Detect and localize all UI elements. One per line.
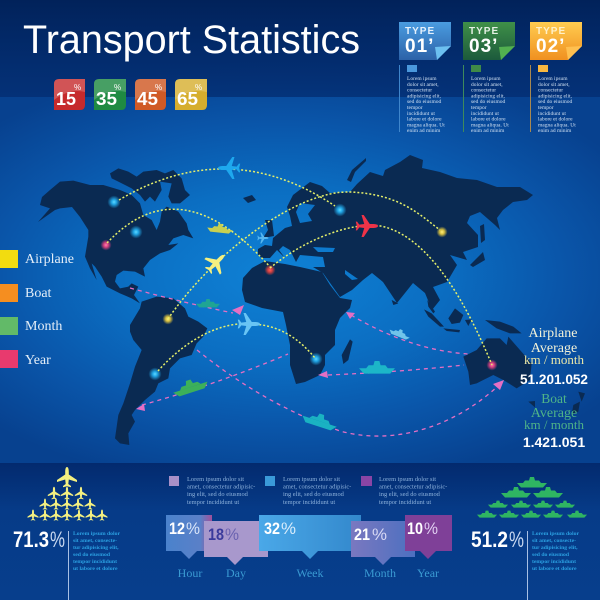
panel: type 03: dolor sit amet,	[471, 82, 503, 88]
badge 45: %	[155, 83, 162, 92]
airplane average stats	[520, 326, 588, 387]
panel: type 01: incididunt ut	[407, 111, 435, 117]
panel: type 02: enim ad minim	[538, 128, 572, 134]
panel: type 03: incididunt ut	[471, 111, 499, 117]
icon: blue plane	[218, 157, 240, 179]
chart labels	[178, 566, 439, 580]
airplane formation	[28, 467, 108, 521]
iceland	[243, 195, 256, 203]
key: blue: tempor incididunt ut	[283, 499, 335, 506]
panel: type 02: dolor sit amet,	[538, 82, 570, 88]
novaya zemlya	[347, 158, 366, 182]
key: purple: amet, consectetur adipisic-	[379, 484, 447, 490]
key: purple: ing elit, sed do eiusmod	[379, 491, 441, 498]
airplane average stats: km / month	[524, 352, 584, 367]
madagascar	[342, 339, 353, 364]
key: blue: Lorem ipsum dolor sit	[283, 476, 340, 483]
airplane average stats: 51.201.052	[520, 371, 588, 387]
badge 45	[135, 79, 166, 110]
boat average stats: Average	[531, 406, 577, 421]
airplane note: Lorem ipsum dolor	[73, 531, 120, 537]
panel: type 02: incididunt ut	[538, 111, 566, 117]
bar: week 32	[259, 515, 361, 559]
tasmania and new zealand	[528, 392, 585, 415]
airplane note	[68, 531, 120, 600]
boat average stats: km / month	[524, 417, 584, 432]
badge 35	[94, 79, 126, 110]
panel: type 03: tempor	[471, 105, 487, 111]
airplane note: tempor incididunt	[73, 559, 117, 565]
panel: type 02: tempor	[538, 105, 554, 111]
africa	[242, 261, 352, 384]
airplane note: ut labore et dolore	[73, 566, 118, 572]
panel: type 03: Lorem ipsum	[471, 76, 501, 82]
boat route arrowheads	[136, 305, 504, 411]
bar: hour 12: %	[186, 519, 200, 538]
panel: type 01: consectetur	[407, 88, 432, 94]
boat routes	[130, 288, 498, 436]
key: lavender	[169, 476, 255, 506]
south america	[115, 297, 207, 445]
chart labels: Day	[226, 566, 246, 580]
badge 15	[54, 79, 85, 110]
legend: airplane: Airplane	[25, 252, 74, 267]
panel: type 01: magna aliqua. Ut	[407, 122, 445, 128]
boat average stats: Boat	[541, 391, 567, 406]
key: purple: tempor incididunt ut	[379, 499, 431, 506]
boat note	[527, 531, 579, 600]
panel: type 02: adipisicing elit,	[538, 93, 573, 99]
key: lavender: Lorem ipsum dolor sit	[187, 476, 244, 483]
boat average stats: 1.421.051	[523, 434, 585, 450]
boat average stats	[523, 391, 585, 450]
badge 45: 45	[137, 89, 158, 109]
panel: type 02: sed do eiusmod	[538, 99, 572, 105]
panel: type 03: labore et dolore	[471, 117, 506, 123]
world map	[38, 155, 585, 445]
airplane note: sit amet, consecte-	[73, 538, 117, 544]
panel: type 01	[399, 22, 451, 134]
north america	[38, 181, 193, 303]
bar: year 10: %	[424, 519, 438, 538]
bar: day 18: %	[225, 525, 239, 544]
bar: month 21	[351, 521, 415, 565]
bar: month 21: 21	[354, 525, 370, 544]
legend: month: Month	[25, 319, 62, 334]
badge 65: %	[195, 83, 202, 92]
icon: light blue plane	[238, 313, 260, 335]
airplane note: sed do eiusmod	[73, 552, 111, 558]
boat note: sed do eiusmod	[532, 552, 570, 558]
icon: light boat	[389, 326, 411, 341]
panel: type 01: TYPE	[405, 26, 435, 37]
panel: type 03: TYPE	[469, 26, 499, 37]
japan and sakhalin	[470, 224, 485, 267]
chart labels: Year	[417, 566, 439, 580]
panel: type 01: sed do eiusmod	[407, 99, 441, 105]
airplane average stats: Average	[531, 341, 577, 356]
airplane percentage: 71.3	[13, 527, 49, 552]
percentage badges	[54, 79, 207, 110]
bar: day 18: 18	[208, 525, 224, 544]
icon: red plane	[356, 215, 378, 237]
panel: type 01: enim ad minim	[407, 128, 441, 134]
australia	[463, 337, 532, 388]
badge 65	[175, 79, 207, 110]
boat note: tur adipisicing elit,	[532, 545, 578, 551]
panel: type 02: TYPE	[536, 26, 566, 37]
panel: type 03: consectetur	[471, 88, 496, 94]
legend	[0, 250, 74, 368]
panel: type 02: magna aliqua. Ut	[538, 122, 576, 128]
flight routes	[107, 169, 492, 371]
chart labels: Week	[296, 566, 324, 580]
bar: hour 12	[166, 515, 212, 559]
legend: boat: Boat	[25, 286, 52, 301]
title: Transport Statistics	[23, 18, 360, 62]
panel: type 01: Lorem ipsum	[407, 76, 437, 82]
arctic islands and greenland	[110, 168, 190, 203]
legend: year: Year	[25, 353, 51, 368]
bar: week 32: %	[281, 519, 296, 538]
boat note: tempor incididunt	[532, 559, 576, 565]
bar: year 10: 10	[407, 519, 423, 538]
panel: type 02: 02’	[536, 36, 565, 57]
time share chart	[166, 515, 452, 565]
badge 65: 65	[177, 89, 198, 109]
bar: hour 12: 12	[169, 519, 185, 538]
key: lavender: amet, consectetur adipisic-	[187, 484, 255, 490]
icon: teal boat	[196, 299, 220, 307]
icon: faded plane	[257, 232, 268, 244]
key: purple	[361, 476, 447, 506]
badge 15: 15	[56, 89, 76, 109]
panel: type 01: adipisicing elit,	[407, 93, 442, 99]
key: blue: ing elit, sed do eiusmod	[283, 491, 345, 498]
icon: yellow plane	[200, 247, 232, 279]
panel: type 01: dolor sit amet,	[407, 82, 439, 88]
badge 35: %	[114, 83, 121, 92]
panel: type 02	[530, 22, 582, 134]
panel: type 03: sed do eiusmod	[471, 99, 505, 105]
airplane note: tur adipisicing elit,	[73, 545, 119, 551]
boat formation	[477, 477, 587, 518]
panel: type 03	[463, 22, 515, 134]
icon: teal boat south	[301, 409, 339, 432]
key: blue	[265, 476, 351, 506]
route glows	[100, 196, 498, 380]
panel: type 03: 03’	[469, 36, 498, 57]
panel: type 01: tempor	[407, 105, 423, 111]
bar: day 18	[204, 521, 268, 565]
icon: yellow boat	[207, 222, 233, 234]
badge 35: 35	[96, 89, 117, 109]
chart key	[169, 476, 447, 506]
panel: type 01: labore et dolore	[407, 117, 442, 123]
boat note: sit amet, consecte-	[532, 538, 576, 544]
key: purple: Lorem ipsum dolor sit	[379, 476, 436, 483]
panel: type 03: enim ad minim	[471, 128, 505, 134]
key: lavender: ing elit, sed do eiusmod	[187, 491, 249, 498]
boat percentage: 51.2	[471, 527, 508, 552]
panel: type 03: magna aliqua. Ut	[471, 122, 509, 128]
key: lavender: tempor incididunt ut	[187, 499, 239, 506]
airplane percentage: %	[50, 527, 65, 552]
boat percentage: %	[509, 527, 524, 552]
britain	[263, 220, 274, 238]
bar: year 10	[405, 515, 452, 559]
key: blue: amet, consectetur adipisic-	[283, 484, 351, 490]
chart labels: Month	[364, 566, 396, 580]
panel: type 03: adipisicing elit,	[471, 93, 506, 99]
bar: week 32: 32	[264, 519, 280, 538]
badge 15: %	[74, 83, 81, 92]
panel: type 02: labore et dolore	[538, 117, 573, 123]
airplane average stats: Airplane	[529, 326, 577, 341]
indonesia and philippines	[392, 300, 522, 333]
boat note: ut labore et dolore	[532, 566, 577, 572]
bar: month 21: %	[372, 525, 387, 544]
chart labels: Hour	[178, 566, 202, 580]
panel: type 02: consectetur	[538, 88, 563, 94]
icon: green boat	[171, 375, 209, 398]
boat note: Lorem ipsum dolor	[532, 531, 579, 537]
panel: type 01: 01’	[405, 36, 434, 57]
icon: cyan boat	[359, 361, 395, 374]
eurasia	[258, 155, 533, 310]
panel: type 02: Lorem ipsum	[538, 76, 568, 82]
